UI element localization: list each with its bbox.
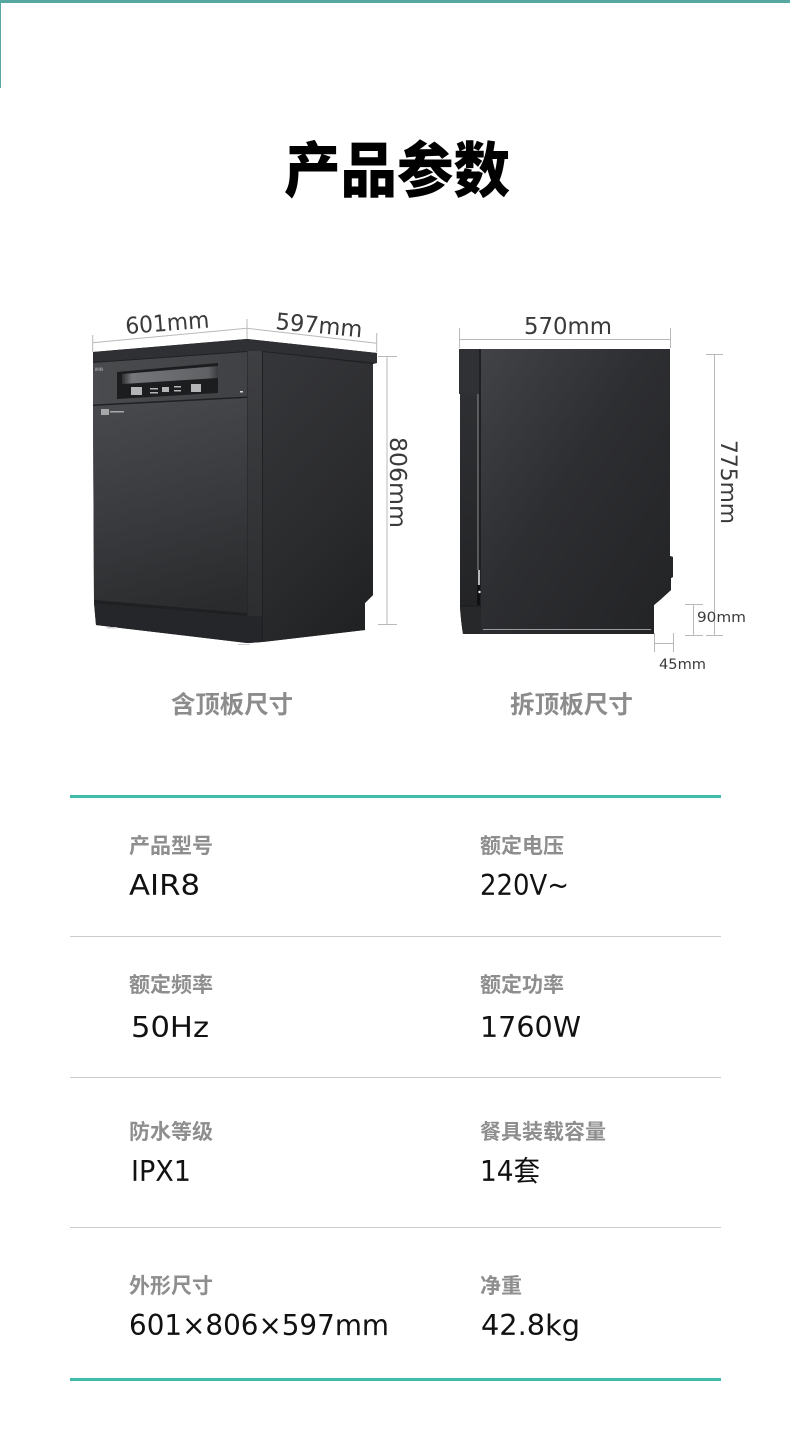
indicator	[240, 391, 243, 392]
row divider	[70, 1077, 721, 1078]
dimension: 570mm	[460, 314, 670, 348]
bottom highlight	[483, 629, 651, 630]
dimension: 775mm	[706, 354, 740, 636]
spec: tableware capacity: 14套	[480, 1155, 540, 1188]
feet	[107, 627, 250, 645]
corner column	[248, 351, 262, 643]
spec: net weight: 42.8kg	[481, 1309, 580, 1342]
kick	[460, 607, 481, 634]
spec: dimensions: 外形尺寸	[129, 1275, 213, 1298]
spec sticker	[101, 409, 124, 415]
dimension: 601mm: 601mm	[124, 307, 210, 340]
dimension: 806mm	[378, 356, 410, 624]
dimension: 45mm: 45mm	[659, 657, 706, 673]
title: 产品参数	[284, 138, 510, 205]
spec: tableware capacity	[480, 1120, 606, 1188]
dishwasher without top panel, side view	[459, 349, 673, 634]
spec: waterproof grade: IPX1	[131, 1155, 191, 1188]
spec: net weight	[480, 1275, 580, 1342]
caption: without top panel: 拆顶板尺寸	[510, 691, 633, 719]
table top rule	[70, 795, 721, 798]
row divider	[70, 936, 721, 937]
spec: model: 产品型号	[129, 835, 213, 858]
hinge	[477, 570, 481, 605]
top edge frame accent	[0, 0, 790, 88]
table bottom rule	[70, 1378, 721, 1381]
spec: rated voltage: 额定电压	[480, 834, 564, 858]
brand mark: WAHIN	[95, 367, 103, 373]
spec: model	[129, 835, 213, 902]
control panel face	[93, 352, 247, 404]
dimension: 597mm	[247, 309, 377, 352]
side panel	[263, 352, 373, 642]
spec: net weight: 净重	[480, 1275, 522, 1298]
light strip	[122, 366, 218, 384]
spec: dimensions	[129, 1275, 389, 1342]
caption: with top panel: 含顶板尺寸	[171, 691, 293, 719]
door upper block	[459, 349, 479, 394]
spec: tableware capacity: 餐具装载容量	[480, 1120, 606, 1144]
silhouette base	[459, 349, 673, 634]
row divider	[70, 1227, 721, 1228]
spec: waterproof grade	[129, 1121, 213, 1188]
spec: rated frequency: 额定频率	[129, 973, 213, 997]
spec: rated power: 额定功率	[480, 973, 564, 997]
spec: rated frequency	[129, 973, 213, 1044]
dimension: 90mm: 90mm	[697, 610, 746, 626]
dishwasher with top panel, three-quarter view	[93, 339, 377, 645]
spec: rated power: 1760W	[480, 1011, 581, 1044]
dimension: 597mm: 597mm	[274, 309, 364, 343]
silhouette base	[93, 339, 377, 643]
control window	[117, 363, 218, 399]
countertop	[93, 339, 377, 363]
kick plate	[94, 603, 262, 643]
dimension: 570mm: 570mm	[524, 314, 612, 340]
spec: rated power	[480, 973, 581, 1044]
spec: waterproof grade: 防水等级	[129, 1121, 213, 1144]
dimension: 775mm: 775mm	[715, 440, 740, 524]
display buttons	[131, 384, 201, 395]
spec: rated frequency: 50Hz	[131, 1011, 209, 1044]
door face	[93, 398, 247, 613]
dimension: 806mm: 806mm	[384, 437, 410, 528]
dimension: 601mm	[93, 307, 247, 352]
spec: rated voltage	[480, 834, 569, 902]
door edge highlight	[478, 394, 479, 570]
spec: rated voltage: 220V~	[480, 869, 569, 902]
spec: dimensions: 601×806×597mm	[129, 1309, 389, 1342]
body	[481, 349, 673, 634]
dimension: 90mm	[685, 604, 746, 636]
spec: model: AIR8	[129, 869, 200, 902]
door	[460, 393, 478, 605]
dimension: 45mm	[654, 633, 706, 673]
